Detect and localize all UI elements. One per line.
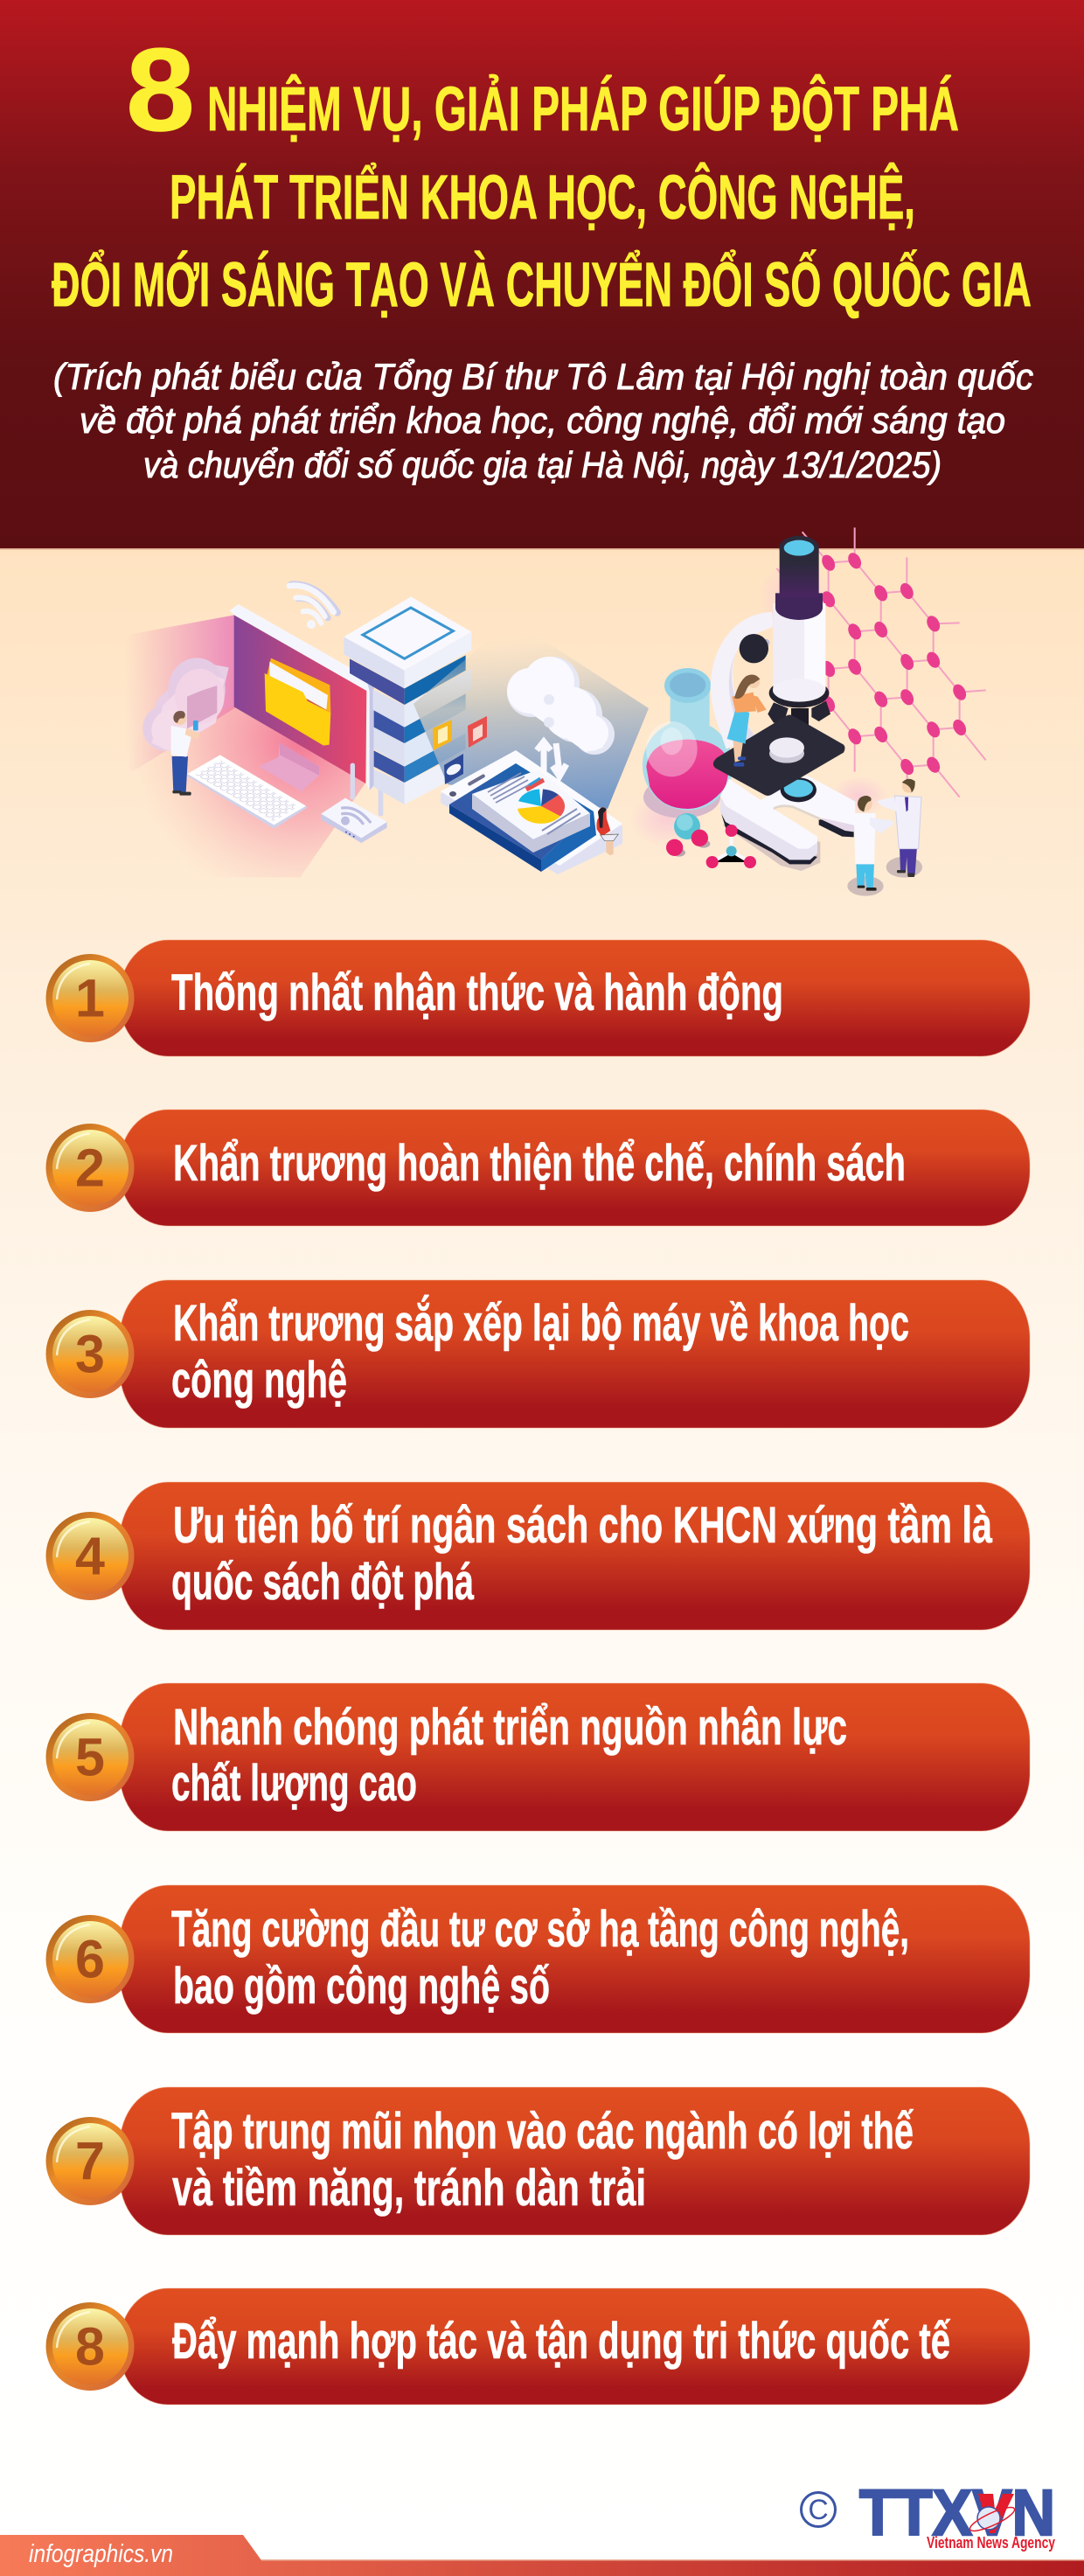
- badge 3: [45, 1310, 135, 1398]
- illustration: digital technology and laboratory: [114, 527, 986, 896]
- icon: wifi: [289, 584, 337, 629]
- badge 4: 4: [75, 1527, 105, 1586]
- item 2: [45, 1110, 1030, 1226]
- label 7: [171, 2103, 914, 2217]
- chart: pie on report: [518, 790, 565, 824]
- logo: TTXVN: TTXVN: [859, 2476, 1055, 2549]
- logo: TTXVN: C: [808, 2494, 829, 2525]
- item 5: [45, 1683, 1030, 1831]
- label 7: và tiềm năng, tránh dàn trải: [172, 2160, 646, 2217]
- label 4: quốc sách đột phá: [171, 1554, 474, 1611]
- page background: [0, 549, 1084, 2576]
- label 4: [171, 1497, 993, 1611]
- subtitle: [53, 356, 1033, 485]
- badge 8: [45, 2302, 135, 2391]
- badge 1: 1: [75, 969, 105, 1028]
- badge 3: 3: [75, 1324, 105, 1383]
- item 8: [45, 2288, 1030, 2405]
- badge 4: [45, 1512, 135, 1600]
- subtitle: và chuyển đổi số quốc gia tại Hà Nội, ngày 13/1/2025): [143, 444, 942, 485]
- label 6: [171, 1901, 909, 2015]
- illustration: microscope and lab: [629, 527, 986, 896]
- header panel: [0, 0, 1084, 549]
- footer source: infographics.vn: [29, 2540, 173, 2568]
- title: 8: [126, 24, 195, 156]
- icon: seated woman with laptop: [596, 807, 618, 855]
- light beam from phone: [413, 628, 649, 809]
- illustration: computer and server: [114, 584, 471, 877]
- label 5: chất lượng cao: [171, 1755, 417, 1812]
- badge 2: [45, 1124, 135, 1212]
- subtitle: (Trích phát biểu của Tổng Bí thư Tô Lâm tại Hội nghị toàn quốc: [53, 356, 1033, 397]
- badge 1: [45, 954, 135, 1042]
- title: [52, 24, 1032, 320]
- label 1: Thống nhất nhận thức và hành động: [171, 964, 783, 1021]
- pill 5: [120, 1683, 1030, 1831]
- item 7: [45, 2087, 1030, 2235]
- item 4: [45, 1482, 1030, 1630]
- icon: man with phone: [171, 711, 199, 796]
- item 1: [45, 940, 1030, 1056]
- pill 7: [120, 2087, 1030, 2235]
- icon: microscope: [711, 536, 855, 871]
- pill 4: [120, 1482, 1030, 1630]
- item 6: [45, 1885, 1030, 2033]
- label 6: bao gồm công nghệ số: [173, 1958, 550, 2015]
- label 5: [171, 1699, 847, 1812]
- footer bar: [0, 2535, 1084, 2576]
- icons: spheres and molecule: [666, 813, 756, 868]
- icon: server stack: [344, 596, 471, 804]
- icon: flask: [643, 668, 733, 818]
- pill 8: [120, 2288, 1030, 2405]
- pill 6: [120, 1885, 1030, 2033]
- badge 7: 7: [75, 2132, 105, 2191]
- icon: cloud sync: [507, 657, 615, 776]
- item 3: [45, 1280, 1030, 1428]
- subtitle: về đột phá phát triển khoa học, công nghệ, đổi mới sáng tạo: [80, 400, 1005, 441]
- icon: smartphone with report: [441, 750, 622, 874]
- badge 7: [45, 2117, 135, 2205]
- label 3: [171, 1295, 909, 1409]
- badge 8: 8: [75, 2317, 105, 2377]
- badge 5: [45, 1713, 135, 1801]
- badge 6: 6: [75, 1929, 105, 1988]
- pill 3: [120, 1280, 1030, 1428]
- molecule lattice: [776, 527, 986, 797]
- badge 6: [45, 1915, 135, 2003]
- pill 2: [120, 1110, 1030, 1226]
- badge 5: 5: [75, 1728, 105, 1787]
- label 3: công nghệ: [171, 1352, 347, 1409]
- icons: floating apps: [433, 716, 487, 784]
- pill 1: [120, 940, 1030, 1056]
- icon: scientists shaking hands: [847, 779, 922, 896]
- badge 2: 2: [75, 1138, 105, 1198]
- icon: woman on stage: [727, 674, 767, 767]
